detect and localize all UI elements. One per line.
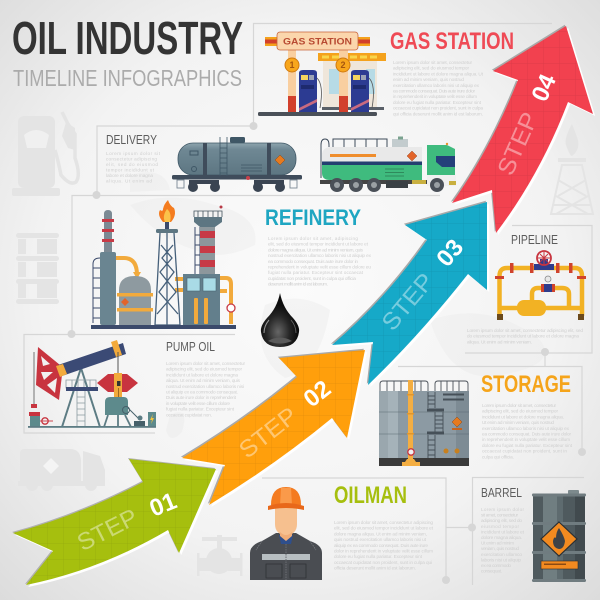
text block: gas station: dolore eu fugiat nulla pariatur. Excepteur sint bbox=[393, 100, 482, 105]
text block: oilman: dolor in reprehenderit in voluptate velit esse cillum bbox=[334, 548, 433, 554]
arrow: step 03 bbox=[331, 201, 489, 387]
step number: 03 bbox=[431, 234, 469, 272]
text block: pump oil: ut aliquip ex ea commodo consequat. bbox=[166, 390, 238, 394]
icon: oilman worker bbox=[250, 487, 322, 580]
text block: gas station: ea commodo consequat. Duis aute irure dolor bbox=[393, 88, 475, 94]
icon: gas station: GAS STATION bbox=[283, 36, 352, 46]
text block: gas station: exercitation ullamco laboris nisi ut aliquip ex bbox=[393, 83, 480, 88]
text block: delivery: labore et dolore magna bbox=[106, 173, 153, 178]
text block: barrel: sit amet, consectetur bbox=[481, 513, 518, 518]
heading: barrel: BARREL bbox=[481, 485, 522, 500]
text block: pump oil: Lorem ipsum dolor sit amet, consectetur bbox=[166, 361, 245, 366]
text block: barrel: veniam, quis nostrud bbox=[481, 546, 519, 551]
text block: pump oil: nostrud exercitation ullamco laboris nisi bbox=[166, 384, 244, 389]
heading: oilman: OILMAN bbox=[334, 482, 407, 509]
text block: oilman: quis nostrud exercitation ullamco laboris nisi ut bbox=[334, 537, 427, 542]
text block: barrel bbox=[481, 507, 525, 574]
ghost icon: valve bbox=[197, 535, 242, 576]
ghost icon: oil derrick bbox=[551, 124, 593, 214]
text block: storage: in reprehenderit in voluptate velit esse cillum bbox=[482, 437, 570, 442]
text block: barrel: exercitation ullamco bbox=[481, 552, 522, 557]
text block: pump oil: occaecat cupidatat non. bbox=[166, 412, 212, 417]
text block: barrel: Lorem ipsum dolor bbox=[481, 507, 524, 512]
text block: barrel: Ut enim ad minim bbox=[481, 541, 514, 546]
panel: storage bbox=[379, 371, 573, 466]
text block: storage: Lorem ipsum dolor sit amet, consectetur bbox=[482, 403, 556, 408]
icon: gas station: 2 bbox=[340, 60, 346, 70]
text block: pump oil: in voluptate velit esse cillum dolore bbox=[166, 401, 230, 406]
text block: refinery: Lorem ipsum dolor sit amet, adipiscing bbox=[268, 236, 358, 241]
text block: refinery: deserunt mollit anim id est laborum. bbox=[268, 282, 328, 287]
text block: delivery: Lorem ipsum dolor sit bbox=[106, 151, 161, 156]
text block: gas station: qui officia deserunt mollit anim id est laborum. bbox=[393, 111, 483, 116]
text block: gas station: Lorem ipsum dolor sit amet, consectetur bbox=[393, 60, 472, 65]
heading: delivery: DELIVERY bbox=[106, 132, 157, 147]
text block: barrel: adipiscing elit, sed do bbox=[481, 518, 522, 523]
step label: STEP bbox=[377, 268, 440, 336]
text block: gas station: enim ad minim veniam, quis nostrud bbox=[393, 77, 464, 82]
text block: barrel: dolore magna aliqua. bbox=[481, 535, 522, 540]
text block: barrel: consequat. bbox=[481, 569, 502, 574]
text block: pump oil: aliqua. Ut enim ad minim veniam, quis bbox=[166, 378, 241, 383]
text block: refinery bbox=[268, 236, 372, 287]
text block: gas station: in reprehenderit in voluptate velit esse cillum bbox=[393, 94, 477, 99]
text block: pump oil: Duis aute irure dolor in reprehenderit bbox=[166, 395, 237, 400]
panel: pipeline bbox=[467, 232, 586, 344]
title: OIL INDUSTRY bbox=[12, 12, 243, 64]
text block: storage: exercitation ullamco laboris nisi ut aliquip ex bbox=[482, 426, 570, 431]
text block: refinery: reprehenderit in voluptate velit esse cillum dolore eu bbox=[268, 264, 371, 270]
text block: delivery: aliqua. Ut enim ad bbox=[106, 178, 152, 184]
icon: gas station bbox=[258, 32, 386, 116]
text block: storage: occaecat cupidatat non proident, sunt in bbox=[482, 449, 567, 454]
text block: storage: ea commodo consequat. Duis aute irure dolor bbox=[482, 432, 571, 436]
text block: storage: incididunt ut labore et dolore magna aliqua. bbox=[482, 414, 564, 419]
text block: barrel: ex ea commodo bbox=[481, 563, 511, 568]
heading: pump oil: PUMP OIL bbox=[166, 339, 215, 354]
text block: pipeline bbox=[467, 328, 583, 344]
text block: refinery: ea commodo consequat. Duis aute irure dolor in bbox=[268, 259, 358, 264]
text block: pipeline: do eiusmod tempor incididunt ut labore et dolore magna bbox=[467, 334, 579, 339]
step label: STEP bbox=[73, 504, 142, 557]
icon: storage tank bbox=[379, 380, 469, 466]
text block: gas station: occaecat cupidatat non proident, sunt in culpa bbox=[393, 106, 483, 111]
text block: delivery: tempor incididunt ut bbox=[106, 168, 155, 172]
heading: storage: STORAGE bbox=[481, 371, 571, 398]
text block: pump oil: adipiscing elit, sed do eiusmod tempor bbox=[166, 367, 242, 372]
step number: 04 bbox=[526, 70, 562, 106]
text block: storage: Ut enim ad minim veniam, quis nostrud bbox=[482, 420, 554, 425]
text block: storage: dolore eu fugiat nulla pariatur. Excepteur sint bbox=[482, 443, 573, 448]
heading: refinery: REFINERY bbox=[265, 205, 361, 230]
text block: oilman: elit, sed do eiusmod tempor incididunt ut labore et bbox=[334, 526, 434, 531]
subtitle: TIMELINE INFOGRAPHICS bbox=[13, 65, 242, 91]
text block: barrel: eiusmod tempor bbox=[481, 524, 519, 529]
world map backdrop bbox=[130, 172, 545, 438]
text block: storage: adipiscing elit, sed do eiusmod tempor bbox=[482, 409, 558, 414]
text block: refinery: elit, sed do eiusmod tempor incididunt ut labore et bbox=[268, 242, 369, 247]
icon: oil drop bbox=[261, 293, 299, 347]
panel: pump oil bbox=[28, 339, 245, 428]
text block: gas station: incididunt ut labore et dolore magna aliqua. Ut bbox=[393, 71, 484, 76]
text block: oilman: aliquip ex ea commodo consequat. Duis aute irure bbox=[334, 543, 428, 548]
text block: oilman bbox=[334, 520, 434, 571]
arrow: step 01 bbox=[12, 458, 218, 587]
panel: refinery bbox=[91, 200, 372, 347]
text block: pump oil: incididunt ut labore et dolore magna bbox=[166, 372, 238, 377]
icon: tanker truck bbox=[320, 136, 456, 192]
text block: delivery bbox=[106, 151, 161, 184]
panel: gas station bbox=[258, 28, 514, 116]
text block: oilman: dolore magna aliqua. Ut enim ad minim veniam, bbox=[334, 531, 427, 536]
text block: gas station: adipiscing elit, sed do eiusmod tempor bbox=[393, 66, 469, 71]
text block: refinery: nostrud exercitation ullamco laboris nisi ut aliquip ex bbox=[268, 253, 372, 258]
icon: oil barrel bbox=[532, 490, 586, 582]
text block: refinery: fugiat nulla pariatur. Excepteur sint occaecat bbox=[268, 270, 364, 275]
heading: gas station: GAS STATION bbox=[390, 28, 514, 55]
arrow: step 04 bbox=[451, 25, 595, 235]
panel: barrel bbox=[481, 485, 586, 582]
text block: oilman: officia deserunt mollit anim id est laborum. bbox=[334, 566, 416, 571]
icon: pipeline bbox=[495, 251, 586, 320]
arrow: step 02 bbox=[181, 349, 367, 507]
icon: rail tank wagon bbox=[172, 137, 302, 192]
text block: oilman: occaecat cupidatat non proident, sunt in culpa qui bbox=[334, 560, 432, 565]
text block: pump oil bbox=[166, 361, 245, 417]
ghost icon: fuel pump bbox=[12, 112, 78, 196]
text block: refinery: dolore magna aliqua. Ut enim ad minim veniam, quis bbox=[268, 247, 364, 252]
panel: delivery bbox=[106, 132, 456, 192]
panel: oilman bbox=[250, 482, 434, 580]
step number: 02 bbox=[299, 375, 336, 413]
step number: 01 bbox=[146, 488, 181, 523]
text block: delivery: consectetur adipiscing bbox=[106, 156, 157, 162]
step label: STEP bbox=[234, 402, 303, 464]
text block: refinery: cupidatat non proident, sunt in culpa qui officia bbox=[268, 276, 356, 281]
text block: barrel: laboris nisi ut aliquip bbox=[481, 557, 521, 562]
step label: STEP bbox=[492, 108, 544, 180]
text block: oilman: dolore eu fugiat nulla pariatur. Excepteur sint bbox=[334, 554, 423, 559]
text block: pipeline: aliqua. Ut enim ad minim veniam. bbox=[467, 339, 532, 344]
text block: pipeline: Lorem ipsum dolor sit amet, consectetur adipiscing elit, sed bbox=[467, 328, 583, 333]
icon: pump jack bbox=[28, 340, 156, 428]
text block: barrel: incididunt ut labore et bbox=[481, 529, 525, 534]
text block: oilman: Lorem ipsum dolor sit amet, consectetur adipiscing bbox=[334, 520, 433, 525]
text block: gas station bbox=[393, 60, 484, 116]
text block: pump oil: fugiat nulla pariatur. Excepteur sint bbox=[166, 407, 235, 412]
text block: delivery: elit, sed do eiusmod bbox=[106, 162, 158, 167]
heading: pipeline: PIPELINE bbox=[511, 232, 558, 247]
text block: storage: culpa qui officia. bbox=[482, 454, 514, 459]
icon: gas station: 1 bbox=[289, 60, 295, 70]
ghost icon: truck bbox=[18, 449, 105, 491]
ghost icon: barrels bbox=[16, 233, 59, 304]
icon: refinery plant bbox=[91, 200, 236, 329]
text block: storage bbox=[482, 403, 573, 459]
